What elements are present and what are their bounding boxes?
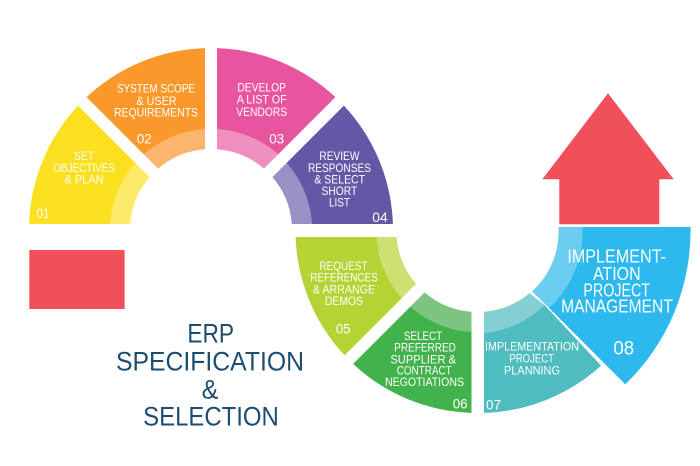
- red up arrow: [542, 93, 674, 224]
- step 04 label: & SELECT: [314, 172, 366, 186]
- step 03 label: VENDORS: [236, 105, 287, 119]
- step 03 number: 03: [269, 130, 284, 146]
- step 05 label: DEMOS: [325, 294, 363, 308]
- step 04 label: REVIEW: [319, 149, 360, 163]
- step 03 label: DEVELOP: [237, 81, 286, 95]
- step 02 label: SYSTEM SCOPE: [117, 82, 195, 96]
- step 05 label: & ARRANGE: [313, 282, 375, 296]
- step 07 label: IMPLEMENTATION: [485, 340, 579, 354]
- lime segment: [296, 237, 402, 355]
- step 06 label: SUPPLIER &: [390, 352, 456, 366]
- step 05 number: 05: [336, 320, 351, 336]
- step 04 label: SHORT: [322, 184, 358, 198]
- step 07 label: PLANNING: [504, 363, 560, 377]
- panel: step 08 implementation project management: [532, 227, 691, 384]
- step 02 number: 02: [137, 130, 152, 146]
- panel: step 01 set objectives: [29, 106, 150, 224]
- step 03 label: [236, 81, 287, 119]
- panel: step 06 select preferred supplier: [353, 292, 472, 413]
- title: [116, 318, 304, 432]
- step 01 label: [53, 149, 115, 186]
- panel: step 07 implementation project planning: [484, 293, 601, 413]
- step 06 label: NEGOTIATIONS: [385, 375, 464, 389]
- step 06 label: CONTRACT: [397, 364, 452, 378]
- title: SELECTION: [143, 402, 279, 432]
- step 07 label: [485, 340, 579, 377]
- orange inner band: [144, 129, 205, 169]
- step 02 label: [114, 82, 198, 120]
- green inner band: [410, 292, 472, 332]
- green segment: [353, 306, 472, 413]
- orange segment: [87, 48, 205, 154]
- step 05 label: REQUEST: [320, 259, 368, 273]
- step 02 label: REQUIREMENTS: [114, 106, 198, 120]
- red rectangle: [29, 250, 125, 309]
- step 06 label: PREFERRED: [394, 341, 456, 355]
- panel: step 04 review responses: [272, 106, 393, 225]
- step 05 label: [310, 259, 378, 308]
- pink segment: [217, 48, 335, 154]
- step 01 label: SET: [74, 149, 95, 163]
- step 08 label: PROJECT: [583, 281, 650, 301]
- step 08 label: ATION: [593, 264, 641, 284]
- step 04 number: 04: [372, 209, 388, 225]
- step 01 label: OBJECTIVES: [53, 161, 115, 175]
- panel: step 05 request references: [296, 237, 416, 355]
- step 04 label: LIST: [329, 196, 351, 210]
- step 03 label: A LIST OF: [237, 92, 287, 106]
- panel: step 02 system scope: [87, 48, 205, 169]
- panel: step 03 develop list of vendors: [217, 48, 335, 169]
- step 07 label: PROJECT: [509, 352, 555, 366]
- title: &: [202, 374, 218, 404]
- step 06 label: SELECT: [404, 329, 443, 343]
- yellow segment: [29, 106, 136, 224]
- step 01 number: 01: [36, 205, 50, 221]
- blue segment: [549, 227, 691, 384]
- lime inner band: [377, 237, 416, 298]
- step 08 label: MANAGEMENT: [561, 297, 673, 317]
- step 05 label: REFERENCES: [310, 271, 378, 285]
- purple segment: [286, 106, 393, 224]
- yellow inner band: [110, 163, 150, 224]
- step 04 label: RESPONSES: [308, 161, 371, 175]
- step 08 label: IMPLEMENT-: [567, 247, 666, 267]
- step 08 label: [561, 247, 673, 317]
- teal inner band: [484, 293, 544, 333]
- step 01 label: & PLAN: [64, 172, 104, 186]
- step 08 number: 08: [613, 338, 634, 360]
- purple inner band: [272, 163, 312, 224]
- teal segment: [484, 305, 601, 413]
- title: ERP: [187, 318, 234, 348]
- step 06 label: [385, 329, 464, 389]
- title: SPECIFICATION: [116, 347, 304, 377]
- pink inner band: [217, 129, 278, 169]
- step 02 label: & USER: [136, 94, 177, 108]
- step 06 number: 06: [453, 396, 468, 412]
- step 07 number: 07: [486, 396, 501, 412]
- step 04 label: [308, 149, 371, 210]
- blue inner band: [532, 227, 582, 308]
